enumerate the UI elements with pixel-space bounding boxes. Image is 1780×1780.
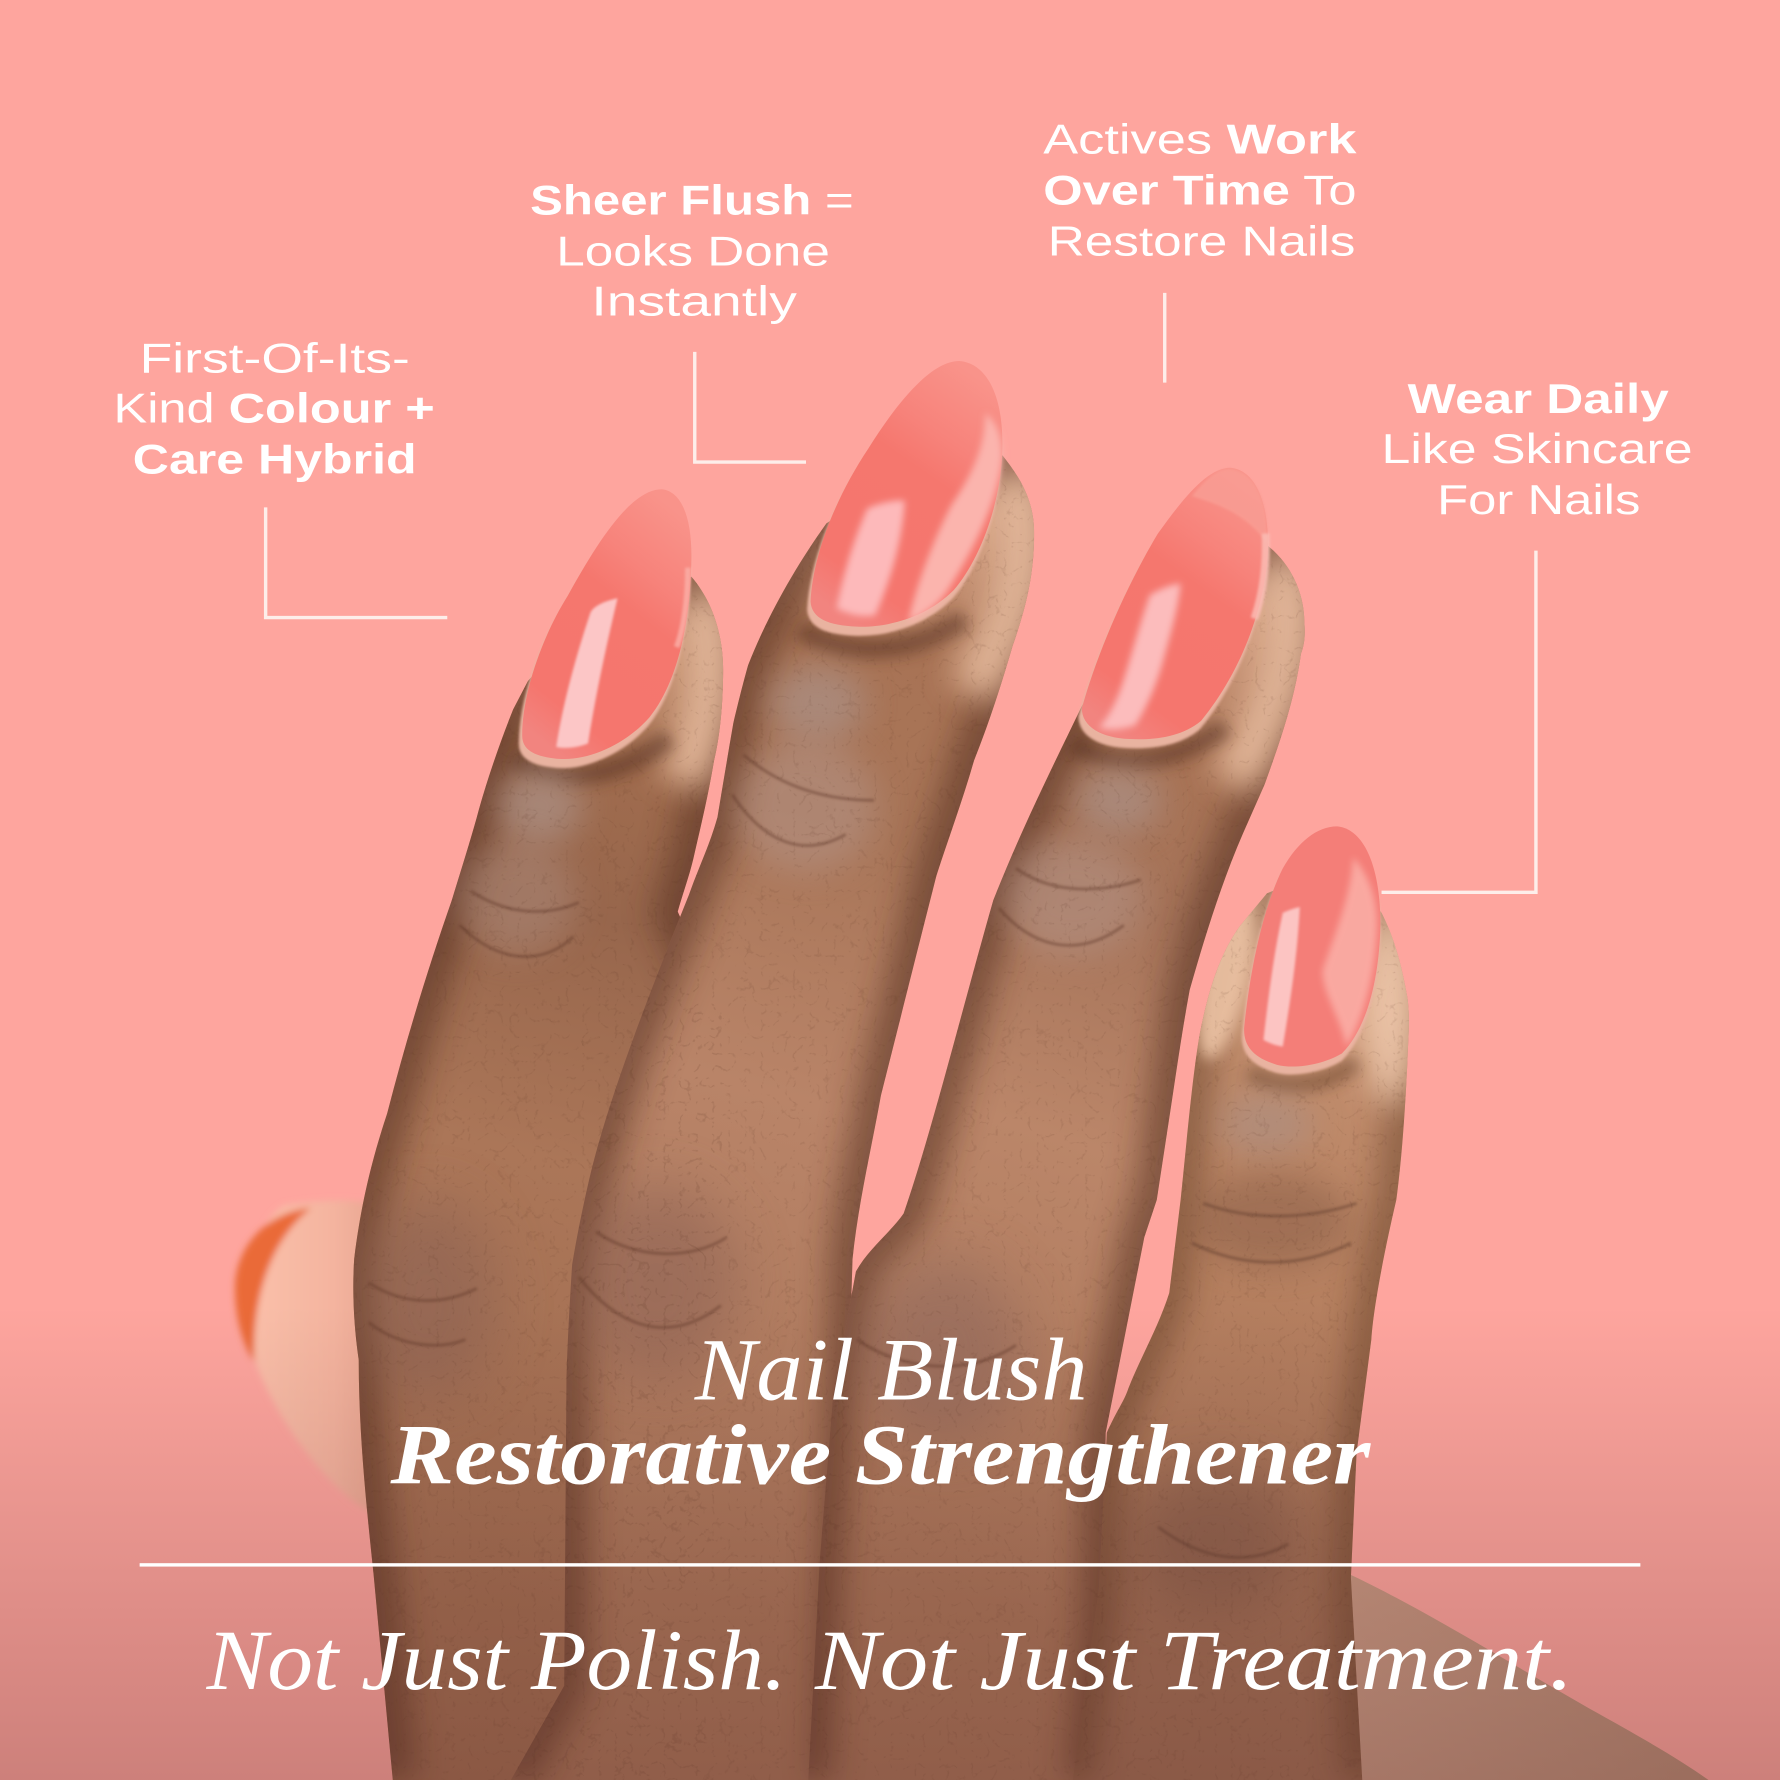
finger: ring xyxy=(795,534,1317,1780)
callout: wear daily: For Nails xyxy=(1437,476,1640,523)
thumb xyxy=(235,1200,392,1515)
callout: sheer flush: Instantly xyxy=(591,278,797,325)
skin texture xyxy=(341,443,1419,1780)
title: product name: Nail Blush xyxy=(694,1322,1088,1420)
hand photo illustration xyxy=(235,361,1708,1780)
title: product name: Restorative Strengthener xyxy=(389,1407,1372,1503)
callout: sheer flush xyxy=(530,177,854,462)
callout: sheer flush: Sheer Flush = xyxy=(530,177,854,224)
finger: little xyxy=(1088,891,1409,1780)
tagline: Not Just Treatment. xyxy=(814,1612,1573,1708)
callout: sheer flush: Looks Done xyxy=(556,228,830,275)
tagline xyxy=(206,1612,1573,1708)
nail: index xyxy=(520,489,691,767)
nail: ring xyxy=(1080,468,1268,747)
callout: colour and care hybrid xyxy=(114,334,447,618)
callout: wear daily: Like Skincare xyxy=(1382,425,1693,472)
callout: wear daily: Wear Daily xyxy=(1408,375,1670,422)
callout: colour and care hybrid: Kind Colour + xyxy=(114,384,435,431)
callout: actives work over time xyxy=(1043,115,1357,383)
finger: index xyxy=(353,576,724,1780)
callout: colour and care hybrid: Care Hybrid xyxy=(133,435,417,482)
divider rule xyxy=(140,1563,1640,1567)
nail: little xyxy=(1243,826,1380,1073)
callout: actives work over time: Over Time To xyxy=(1043,166,1357,213)
finger: middle xyxy=(499,443,1044,1780)
nail: middle xyxy=(808,361,1002,635)
callout: actives work over time: Restore Nails xyxy=(1048,217,1355,264)
bottom shade gradient xyxy=(0,1305,1780,1780)
callout: actives work over time: Actives Work xyxy=(1043,115,1357,162)
back of hand xyxy=(1305,1572,1708,1780)
tagline: Not Just Polish. xyxy=(206,1612,787,1708)
title: product name xyxy=(389,1322,1372,1503)
callout: wear daily xyxy=(1382,375,1693,892)
callout: colour and care hybrid: First-Of-Its- xyxy=(140,334,410,381)
